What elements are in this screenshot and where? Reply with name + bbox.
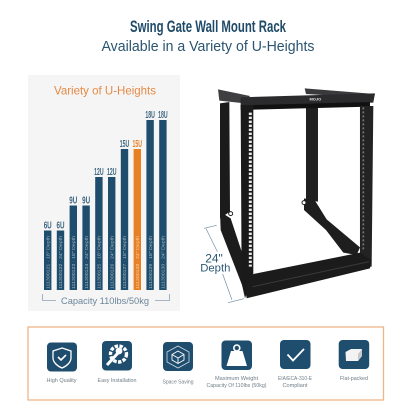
rack product illustration xyxy=(200,88,375,303)
title: Swing Gate Wall Mount Rack xyxy=(130,18,287,36)
depth dimension arrow xyxy=(204,225,244,303)
bar chart: 18U xyxy=(145,110,155,121)
bar part labels: 111300127 · 18" Depth xyxy=(122,236,128,289)
label: maximum weight capacity: Maximum Weight xyxy=(215,376,259,382)
label: EIA/ECA compliance: EIA/ECA-310-E xyxy=(278,376,312,382)
label: flat-packed: Flat-packed xyxy=(340,376,368,382)
bar chart: 6U xyxy=(44,220,52,232)
subtitle: Available in a Variety of U-Heights xyxy=(102,38,314,55)
brand label: MOJO xyxy=(309,97,321,102)
bar chart: 15U xyxy=(133,139,142,150)
bar chart: 12U xyxy=(107,167,116,178)
depth label: 24" xyxy=(205,252,223,266)
label: maximum weight capacity second line: Capacity Of 110lbs (50kg) xyxy=(206,383,267,389)
bar part labels: 111300125 · 18" Depth xyxy=(97,236,103,289)
label: high quality: High Quality xyxy=(46,378,77,384)
bar chart xyxy=(44,110,168,290)
icon: gear and wrench xyxy=(102,341,132,370)
icon: shield xyxy=(47,342,77,372)
bar part labels: 111300122 · 24" Depth xyxy=(58,236,64,289)
bar part labels: 111300121 · 18" Depth xyxy=(45,236,51,289)
front bottom beam xyxy=(245,253,372,298)
panel: features xyxy=(28,327,384,400)
chart heading: Variety of U-Heights xyxy=(54,84,156,98)
bar chart: 9U xyxy=(82,196,90,206)
bar part labels xyxy=(45,236,167,289)
bar part labels: 111300123 · 18" Depth xyxy=(71,236,77,289)
bar chart: 18U xyxy=(158,110,168,121)
bar part labels: 111300124 · 24" Depth xyxy=(84,236,90,289)
bar chart: 12U xyxy=(94,167,104,178)
left bottom arm xyxy=(220,212,247,297)
label: space saving: Space Saving xyxy=(162,380,194,386)
bar chart: 9U xyxy=(69,196,77,206)
right top arm xyxy=(305,88,375,98)
label: easy installation: Easy Installation xyxy=(98,378,136,384)
bar part labels: 111300128 · 24" Depth xyxy=(135,236,141,289)
icon: space-saving cube xyxy=(163,342,193,371)
capacity label: Capacity 110lbs/50kg xyxy=(61,296,149,307)
bar chart: 15U xyxy=(120,139,129,150)
bar part labels: 111300129 · 18" Depth xyxy=(148,236,154,289)
front right post xyxy=(360,106,373,267)
front top beam xyxy=(241,93,375,106)
panel: U-height bar chart xyxy=(28,75,180,311)
icon: check mark xyxy=(280,340,310,369)
label: compliant: Compliant xyxy=(282,383,308,389)
icon: weight xyxy=(222,340,252,370)
right bottom arm xyxy=(304,198,360,255)
bar chart: 6U xyxy=(56,220,64,232)
bar part labels: 111300130 · 24" Depth xyxy=(161,236,167,289)
rack mounting holes xyxy=(246,113,255,267)
hanger loops xyxy=(229,212,233,216)
left top arm xyxy=(218,89,250,103)
capacity bracket xyxy=(42,294,170,300)
rear left post xyxy=(220,102,230,218)
icon: flat-packed box xyxy=(339,340,369,369)
bar part labels: 111300126 · 24" Depth xyxy=(109,236,115,289)
depth label second line: Depth xyxy=(200,263,230,275)
front left post xyxy=(241,105,253,298)
rear right post xyxy=(306,107,318,202)
